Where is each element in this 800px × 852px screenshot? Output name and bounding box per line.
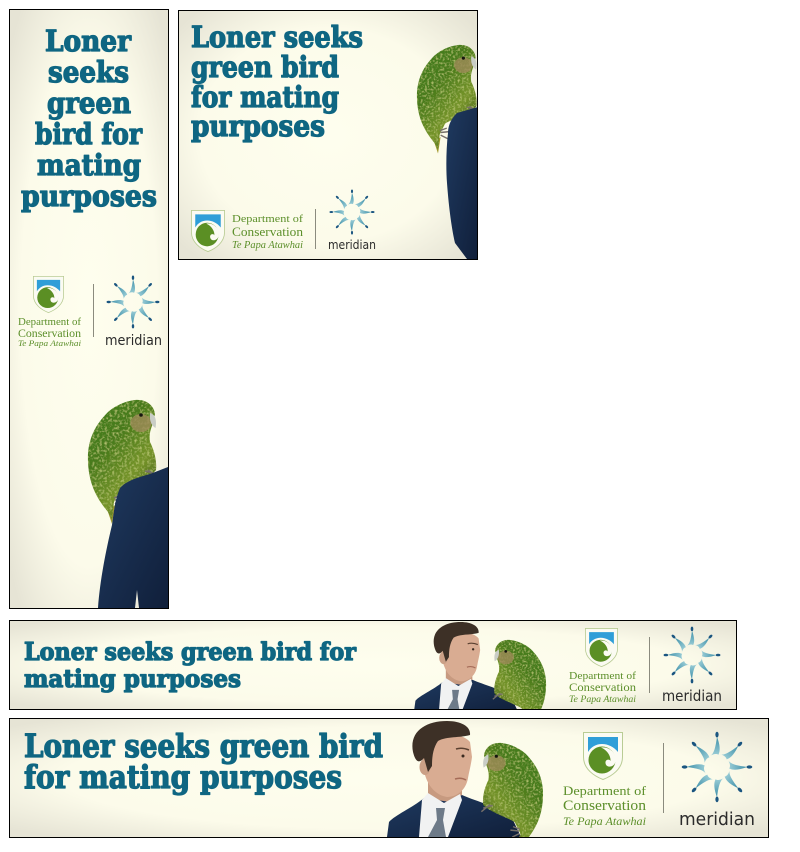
heading: tall banner headline: seeks: [48, 55, 129, 89]
heading: wide banner headline: [24, 728, 383, 796]
logo: Department of Conservation: [563, 732, 647, 828]
logo: meridian: meridian: [679, 809, 755, 830]
heading: wide banner headline: for mating purposes: [24, 759, 342, 796]
panel: square banner: [178, 10, 478, 260]
logo: meridian: [328, 189, 376, 252]
illustration: man with kakapo: [414, 622, 546, 709]
heading: square banner headline: Loner seeks: [191, 20, 363, 54]
logo: Department of Conservation: Conservation: [563, 798, 647, 814]
heading: leaderboard headline: Loner seeks green bird for: [24, 637, 357, 666]
logo: Department of Conservation: Conservation: [232, 225, 304, 239]
logo: meridian: meridian: [662, 687, 722, 705]
heading: square banner headline: for mating: [191, 80, 339, 114]
heading: square banner headline: green bird: [191, 50, 339, 84]
logo: Department of Conservation: Te Papa Atawhai: [232, 240, 303, 251]
logo: meridian: [662, 627, 722, 705]
heading: leaderboard headline: mating purposes: [24, 664, 241, 693]
logo: Department of Conservation: Conservation: [18, 328, 81, 340]
heading: square banner headline: [191, 20, 363, 143]
logo: Department of Conservation: [18, 276, 82, 348]
panel: wide banner: [10, 718, 768, 852]
illustration: kakapo on suited shoulder: [88, 400, 168, 608]
logo: Department of Conservation: Te Papa Atawhai: [18, 338, 82, 348]
panel: leaderboard banner: [9, 620, 737, 710]
logo: meridian: meridian: [328, 238, 376, 252]
panel: tall skyscraper banner: [10, 10, 168, 608]
logo: meridian: [679, 732, 755, 830]
heading: leaderboard headline: [24, 637, 357, 693]
heading: tall banner headline: bird for: [35, 117, 143, 151]
heading: tall banner headline: green: [47, 86, 131, 120]
heading: square banner headline: purposes: [191, 109, 325, 143]
logo: Department of Conservation: Department of: [563, 783, 647, 798]
logo: Department of Conservation: Conservation: [569, 680, 636, 694]
logo: Department of Conservation: Te Papa Atawhai: [569, 694, 637, 704]
illustration: kakapo on suited shoulder: [417, 45, 478, 259]
logo: meridian: meridian: [105, 333, 162, 349]
heading: wide banner headline: Loner seeks green bird: [24, 728, 383, 765]
logo: Department of Conservation: Department of: [18, 317, 82, 328]
logo: Department of Conservation: Department of: [232, 213, 303, 225]
logo: meridian: [105, 276, 162, 349]
logo: Department of Conservation: Te Papa Atawhai: [563, 816, 646, 828]
heading: tall banner headline: [21, 24, 157, 213]
heading: tall banner headline: purposes: [21, 179, 157, 213]
logo: Department of Conservation: Department of: [569, 670, 636, 682]
logo: Department of Conservation: [191, 210, 304, 252]
illustration: man with kakapo: [387, 721, 544, 837]
logo: Department of Conservation: [569, 628, 637, 704]
heading: tall banner headline: mating: [37, 148, 141, 182]
heading: tall banner headline: Loner: [45, 24, 132, 58]
